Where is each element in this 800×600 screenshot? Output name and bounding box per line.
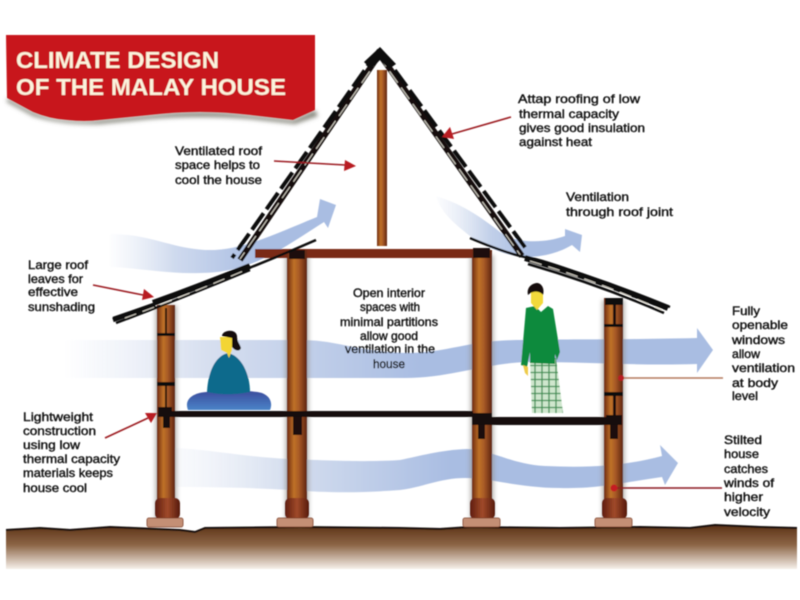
label: lightweight construction: materials keeps	[23, 466, 113, 480]
label: open interior: minimal partitions	[340, 315, 438, 329]
title text: CLIMATE DESIGN	[16, 47, 219, 73]
label: openable windows	[731, 304, 795, 403]
label: attap roofing	[518, 92, 645, 149]
pointer: lightweight construction	[105, 413, 157, 438]
ground	[6, 525, 797, 569]
label: openable windows: openable	[732, 318, 788, 332]
shirt	[521, 306, 560, 367]
airflow arrow: through roof joint	[436, 196, 582, 257]
label: large roof leaves: sunshading	[28, 300, 95, 314]
king post	[377, 70, 387, 246]
label: ventilated roof space: Ventilated roof	[175, 144, 263, 158]
floor beams	[158, 407, 622, 428]
label: lightweight construction: thermal capacity	[23, 452, 120, 466]
label: large roof leaves: leaves for	[28, 272, 83, 286]
label: stilted house: winds of	[723, 476, 775, 490]
airflow arrow: into the roof space	[110, 199, 336, 273]
label: large roof leaves: effective	[28, 285, 78, 299]
attap roof	[113, 47, 670, 323]
title text: OF THE MALAY HOUSE	[16, 74, 286, 100]
pointer: openable windows	[618, 375, 723, 381]
label: openable windows: level	[732, 389, 758, 403]
label: stilted house: catches	[724, 462, 768, 476]
label: open interior	[340, 286, 438, 371]
pointer: stilted house	[610, 484, 722, 492]
label: large roof leaves: Large roof	[28, 258, 89, 272]
post 2	[277, 250, 313, 527]
label: open interior: ventilation in the	[345, 342, 435, 356]
label: stilted house	[723, 433, 775, 519]
label: roof joint ventilation: through roof joint	[566, 205, 674, 219]
lower left roof	[113, 240, 316, 323]
label: large roof leaves	[28, 258, 95, 314]
label: ventilated roof space: cool the house	[175, 173, 262, 187]
label: lightweight construction: Lightweight	[23, 410, 94, 424]
pointer: ventilated roof space	[274, 160, 356, 171]
label: lightweight construction: using low	[23, 438, 80, 452]
label: stilted house: velocity	[724, 505, 770, 519]
label: ventilated roof space	[175, 144, 263, 187]
ridge cap	[364, 47, 396, 69]
label: openable windows: ventilation	[732, 361, 795, 375]
airflow arrow: under floor wind	[150, 445, 678, 492]
upper left roof	[232, 50, 381, 260]
label: openable windows: windows	[731, 333, 785, 347]
label: open interior: spaces with	[360, 300, 420, 314]
post 1	[147, 305, 183, 527]
post 3	[463, 248, 500, 527]
label: stilted house: Stilted	[724, 433, 762, 447]
label: ventilated roof space: space helps to	[175, 158, 260, 172]
house structure	[147, 70, 632, 527]
pointer: roof leaves	[93, 285, 154, 300]
standing man	[521, 283, 563, 413]
label: attap roofing: thermal capacity	[519, 107, 619, 121]
label: roof joint ventilation: Ventilation	[566, 190, 629, 204]
label: open interior: allow good	[360, 329, 418, 343]
label: attap roofing: against heat	[519, 135, 593, 149]
label: open interior: house	[373, 357, 405, 371]
seated woman	[187, 331, 271, 410]
label: openable windows: Fully	[732, 304, 760, 318]
face and hand	[531, 290, 543, 310]
label: lightweight construction	[23, 410, 120, 495]
label: open interior: Open interior	[353, 286, 425, 300]
label: stilted house: house	[724, 447, 759, 461]
label: lightweight construction: house cool	[23, 481, 87, 495]
label: lightweight construction: construction	[23, 424, 96, 438]
roof beam	[255, 249, 475, 258]
label: stilted house: higher	[724, 490, 763, 504]
lower right roof	[470, 238, 670, 313]
label: openable windows: allow	[732, 347, 760, 361]
label: attap roofing: Attap roofing of low	[518, 92, 640, 106]
label: attap roofing: gives good insulation	[519, 121, 645, 135]
label: openable windows: at body	[732, 376, 778, 390]
pointer: attap roofing	[442, 117, 511, 139]
airflow arrow: body level ventilation	[65, 328, 713, 378]
upper right roof	[378, 50, 527, 256]
label: roof joint ventilation	[566, 190, 674, 219]
title banner	[6, 35, 318, 124]
sarong	[530, 358, 563, 413]
post shadows	[155, 255, 625, 525]
post 4	[595, 298, 632, 527]
